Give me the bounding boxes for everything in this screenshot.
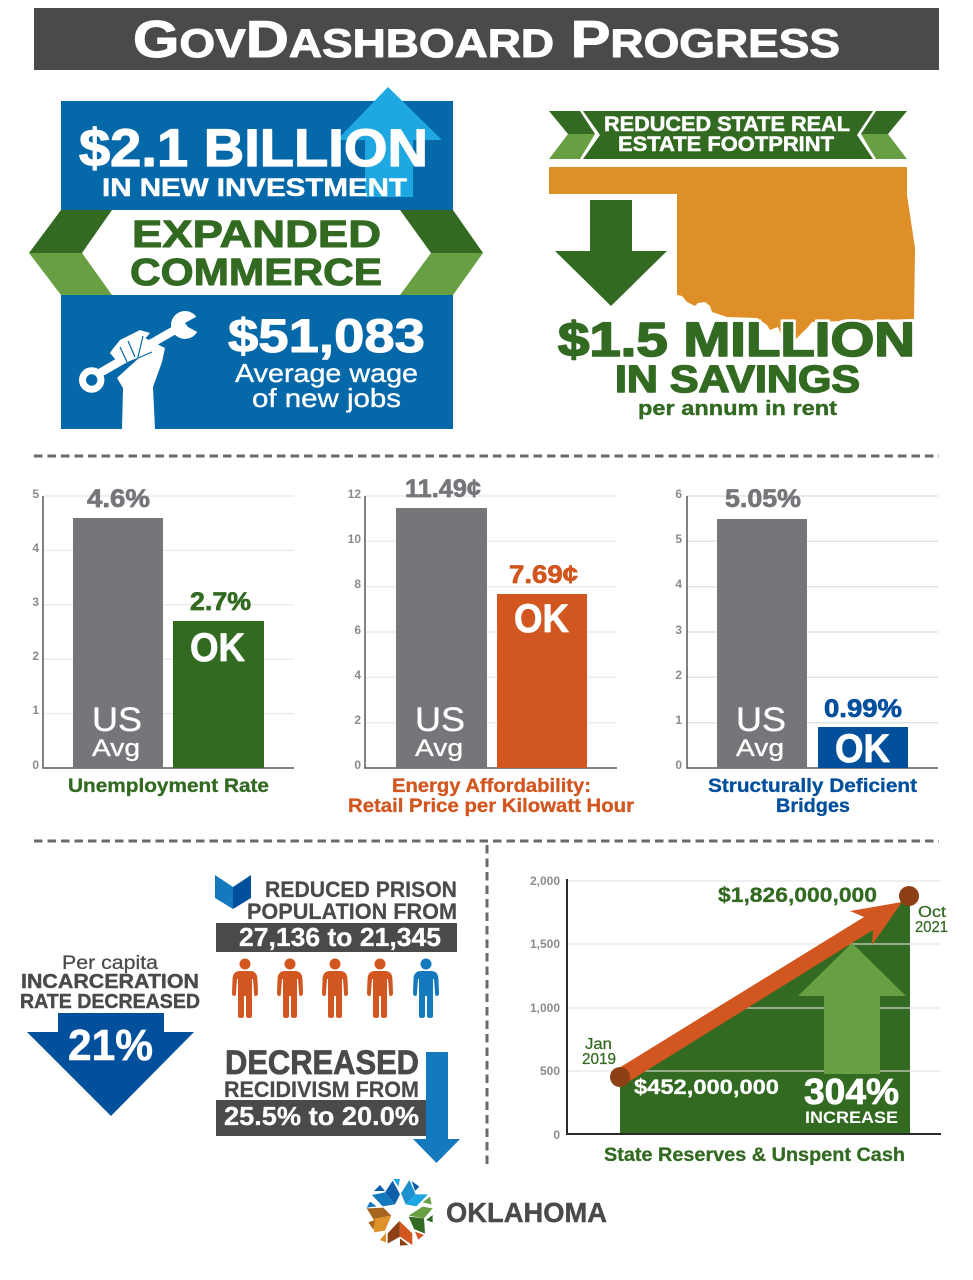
panel: expanded commerce xyxy=(29,87,483,429)
icon: light blue up arrow xyxy=(337,87,442,197)
wordmark: OKLAHOMA xyxy=(446,1197,607,1228)
end date: Oct xyxy=(918,904,947,921)
average wage value: $51,083 xyxy=(228,309,425,362)
bar chart: energy affordability: 10 xyxy=(348,532,361,546)
end point xyxy=(899,886,919,906)
bar: Oklahoma xyxy=(818,695,908,771)
area chart: state reserves: 0 xyxy=(553,1128,560,1142)
heading xyxy=(247,877,457,924)
ribbon ends xyxy=(29,210,483,295)
bar chart: unemployment rate: 4 xyxy=(32,541,39,555)
bar: Oklahoma xyxy=(497,561,587,768)
bar: Oklahoma: 2.7% xyxy=(190,588,251,616)
panel: incarceration rate xyxy=(20,953,200,1116)
bar chart: structurally deficient bridges: 0 xyxy=(675,758,682,772)
percent increase: INCREASE xyxy=(805,1108,898,1127)
heading: POPULATION FROM xyxy=(247,899,457,924)
chart caption: Structurally Deficient xyxy=(708,776,918,797)
percent increase: 304% xyxy=(804,1071,899,1112)
bar chart: energy affordability: 6 xyxy=(354,623,361,637)
bar: US average: Avg xyxy=(92,735,140,762)
savings caption: IN SAVINGS xyxy=(615,359,860,401)
start date: 2019 xyxy=(582,1051,616,1068)
bar: Oklahoma: OK xyxy=(190,626,245,670)
banner ribbon xyxy=(549,111,907,159)
heading: expanded commerce: EXPANDED xyxy=(132,214,381,256)
bar chart: structurally deficient bridges: 5 xyxy=(675,532,682,546)
trend arrow xyxy=(614,902,902,1084)
chart caption xyxy=(348,776,635,817)
bar: US average: 5.05% xyxy=(725,485,801,513)
bar chart: unemployment rate: 3 xyxy=(32,595,39,609)
heading: expanded commerce xyxy=(130,214,382,294)
icon: blue chevron xyxy=(215,875,251,909)
heading: RECIDIVISM FROM xyxy=(224,1077,419,1102)
panel: recidivism xyxy=(216,1044,460,1163)
bar: US average: US xyxy=(415,701,465,739)
chart caption xyxy=(708,776,918,817)
bar: US average: 4.6% xyxy=(87,485,150,513)
blue background panels xyxy=(61,101,453,429)
bar: Oklahoma: 7.69¢ xyxy=(509,561,578,589)
bar chart: structurally deficient bridges: 2 xyxy=(675,668,682,682)
chart caption: State Reserves & Unspent Cash xyxy=(604,1145,905,1166)
bar chart: unemployment rate: 5 xyxy=(32,487,39,501)
investment amount: $2.1 BILLION xyxy=(79,119,428,178)
bar: US average xyxy=(717,485,807,768)
bar: US average: US xyxy=(92,701,142,739)
investment caption: IN NEW INVESTMENT xyxy=(102,174,407,202)
bar: US average: 11.49¢ xyxy=(405,475,481,503)
icon: blue down arrow xyxy=(413,1052,460,1163)
chart caption: Unemployment Rate xyxy=(68,776,269,797)
icon: down arrow with percent: 21% xyxy=(68,1021,153,1070)
bar chart: energy affordability: 12 xyxy=(348,487,361,501)
caption: Per capita xyxy=(62,953,158,974)
bar: Oklahoma xyxy=(173,588,264,768)
bar chart: structurally deficient bridges: 3 xyxy=(675,623,682,637)
average wage caption: Average wage xyxy=(235,358,418,388)
area chart: state reserves xyxy=(530,874,948,1166)
area chart: state reserves: 1,000 xyxy=(530,1001,560,1015)
bar chart: structurally deficient bridges: 6 xyxy=(675,487,682,501)
end date xyxy=(915,904,948,936)
bar chart: energy affordability: 2 xyxy=(354,713,361,727)
icon: star mark xyxy=(367,1179,433,1246)
bar chart: unemployment rate: 1 xyxy=(32,703,39,717)
bar: Oklahoma: OK xyxy=(514,597,569,641)
bar chart: structurally deficient bridges: 1 xyxy=(675,713,682,727)
icon: people row xyxy=(232,958,439,1018)
chart caption: Bridges xyxy=(776,796,850,817)
bar chart: unemployment rate: 0 xyxy=(32,758,39,772)
bar chart: structurally deficient bridges xyxy=(675,485,938,817)
savings note: per annum in rent xyxy=(638,398,837,420)
panel: real estate savings xyxy=(549,111,915,420)
heading xyxy=(224,1044,419,1102)
green area xyxy=(620,896,910,1134)
start point xyxy=(610,1067,630,1087)
heading: expanded commerce: COMMERCE xyxy=(130,252,382,294)
bar chart: unemployment rate: 2 xyxy=(32,649,39,663)
bar: Oklahoma: 0.99% xyxy=(824,695,902,723)
heading: DECREASED xyxy=(225,1044,419,1082)
caption: RATE DECREASED xyxy=(20,991,200,1013)
bar: US average: Avg xyxy=(736,735,784,762)
bar: US average: Avg xyxy=(415,735,463,762)
icon: light green up arrow xyxy=(798,943,906,1074)
chart caption: Energy Affordability: xyxy=(392,776,591,797)
value box: 27,136 to 21,345 xyxy=(239,922,441,952)
bar: US average xyxy=(73,485,163,768)
bar chart: energy affordability: 4 xyxy=(354,668,361,682)
end date: 2021 xyxy=(915,919,948,936)
bar: US average xyxy=(396,475,487,768)
area chart: state reserves: 2,000 xyxy=(530,874,560,888)
caption: INCARCERATION xyxy=(21,971,199,993)
heading: REDUCED PRISON xyxy=(265,877,457,902)
area chart: state reserves: 500 xyxy=(540,1064,560,1078)
banner ribbon: ESTATE FOOTPRINT xyxy=(618,133,834,156)
map: Oklahoma xyxy=(549,167,915,340)
bar chart: energy affordability: 8 xyxy=(354,577,361,591)
bar chart: structurally deficient bridges: 4 xyxy=(675,577,682,591)
savings amount: $1.5 MILLION xyxy=(558,314,915,367)
average wage caption xyxy=(235,358,418,413)
average wage caption: of new jobs xyxy=(252,383,401,413)
bar chart: energy affordability xyxy=(348,475,635,817)
icon: green down arrow xyxy=(555,200,667,306)
bar chart: energy affordability: 0 xyxy=(354,758,361,772)
icon: fist with wrench xyxy=(82,311,203,429)
start date xyxy=(582,1036,616,1068)
caption xyxy=(20,953,200,1013)
start date: Jan xyxy=(585,1036,612,1053)
icon: down arrow with percent xyxy=(27,1013,194,1116)
area chart: state reserves: 1,500 xyxy=(530,937,560,951)
logo: Oklahoma xyxy=(367,1179,607,1246)
bar: US average: US xyxy=(736,701,786,739)
panel: prison population xyxy=(215,875,457,1018)
bar: Oklahoma: OK xyxy=(835,727,890,771)
title banner: GOVDASHBOARD PROGRESS xyxy=(133,11,840,69)
banner ribbon: REDUCED STATE REAL xyxy=(604,113,850,136)
chart caption: Retail Price per Kilowatt Hour xyxy=(348,796,635,817)
bar chart: unemployment rate xyxy=(32,485,294,797)
start value: $452,000,000 xyxy=(634,1076,779,1099)
value box: 25.5% to 20.0% xyxy=(224,1101,419,1131)
end value: $1,826,000,000 xyxy=(718,884,877,907)
